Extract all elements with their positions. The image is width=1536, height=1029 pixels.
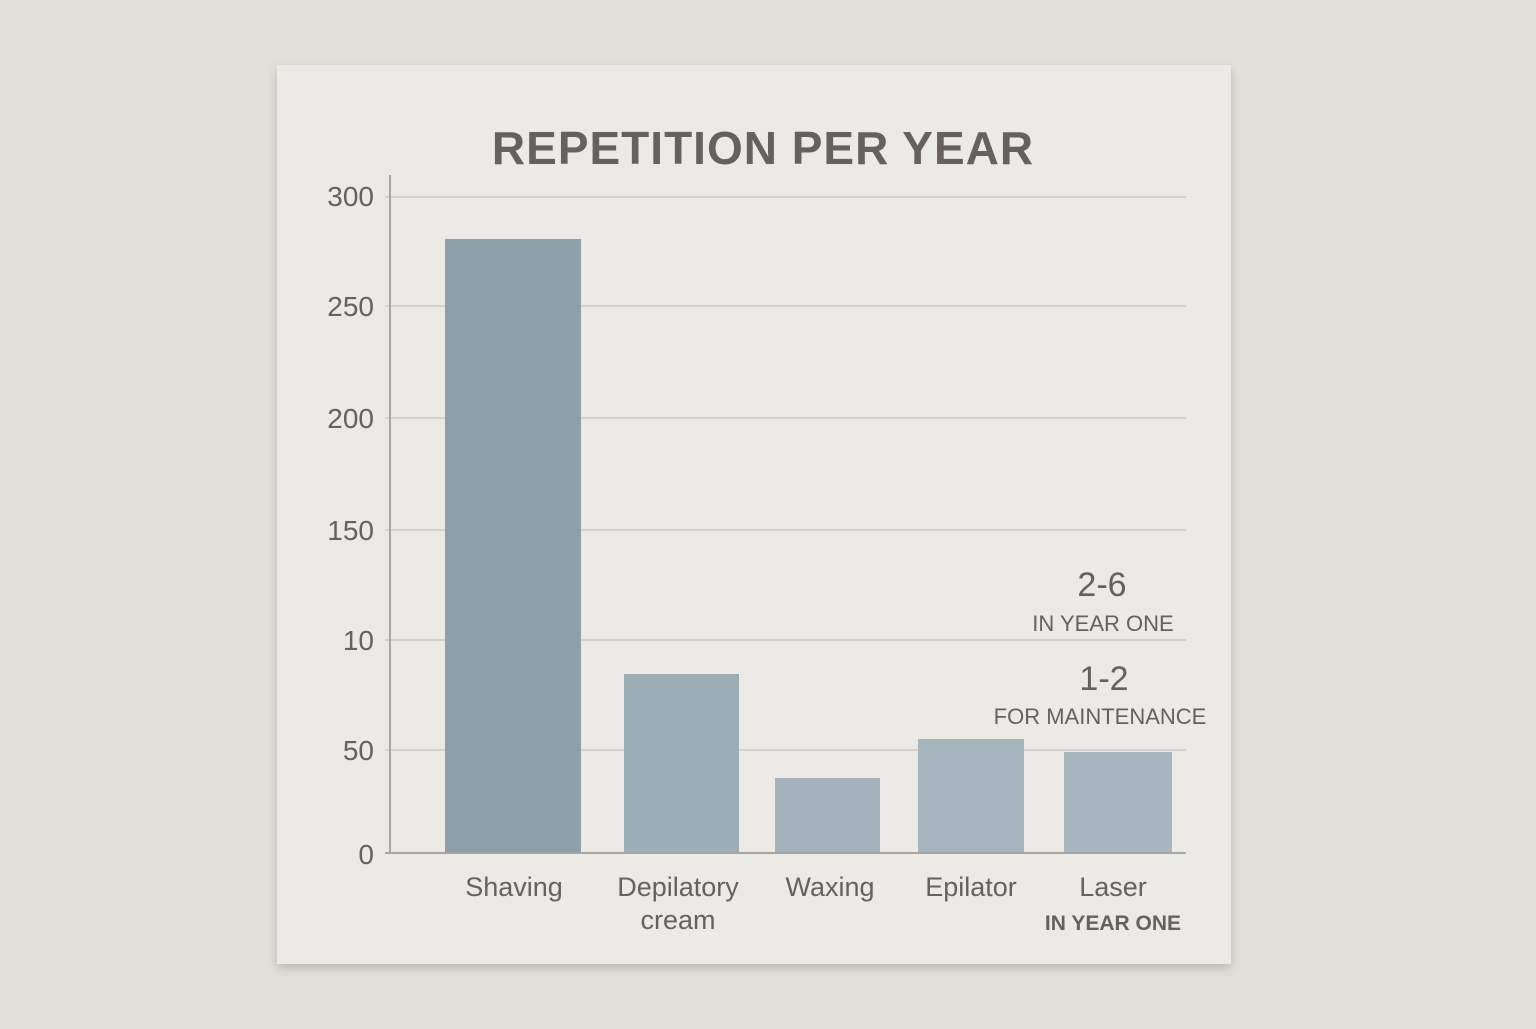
x labels: cream <box>640 905 716 935</box>
y axis: 0 <box>358 839 374 870</box>
y axis: 300 <box>327 181 374 212</box>
y axis: 200 <box>327 403 374 434</box>
y axis: 250 <box>327 291 374 322</box>
callout: laser sessions: 1-2 <box>1079 660 1129 698</box>
x labels: Waxing <box>785 872 875 902</box>
x labels: Epilator <box>925 872 1017 902</box>
y axis: 10 <box>343 625 374 656</box>
callout: laser sessions: FOR MAINTENANCE <box>994 704 1206 729</box>
x labels: Shaving <box>465 872 563 902</box>
y axis: 50 <box>343 735 374 766</box>
callout: laser sessions <box>994 566 1206 729</box>
x labels: Depilatory <box>617 872 739 902</box>
callout: laser sessions: 2-6 <box>1077 566 1127 604</box>
x labels <box>465 872 1181 935</box>
y axis <box>327 175 390 870</box>
callout: laser sessions: IN YEAR ONE <box>1032 611 1174 636</box>
title: REPETITION PER YEAR <box>492 122 1034 174</box>
bar chart <box>445 239 1172 853</box>
y axis: 150 <box>327 515 374 546</box>
x labels: IN YEAR ONE <box>1045 912 1181 935</box>
x labels: Laser <box>1079 872 1147 902</box>
panel: card <box>277 65 1231 964</box>
